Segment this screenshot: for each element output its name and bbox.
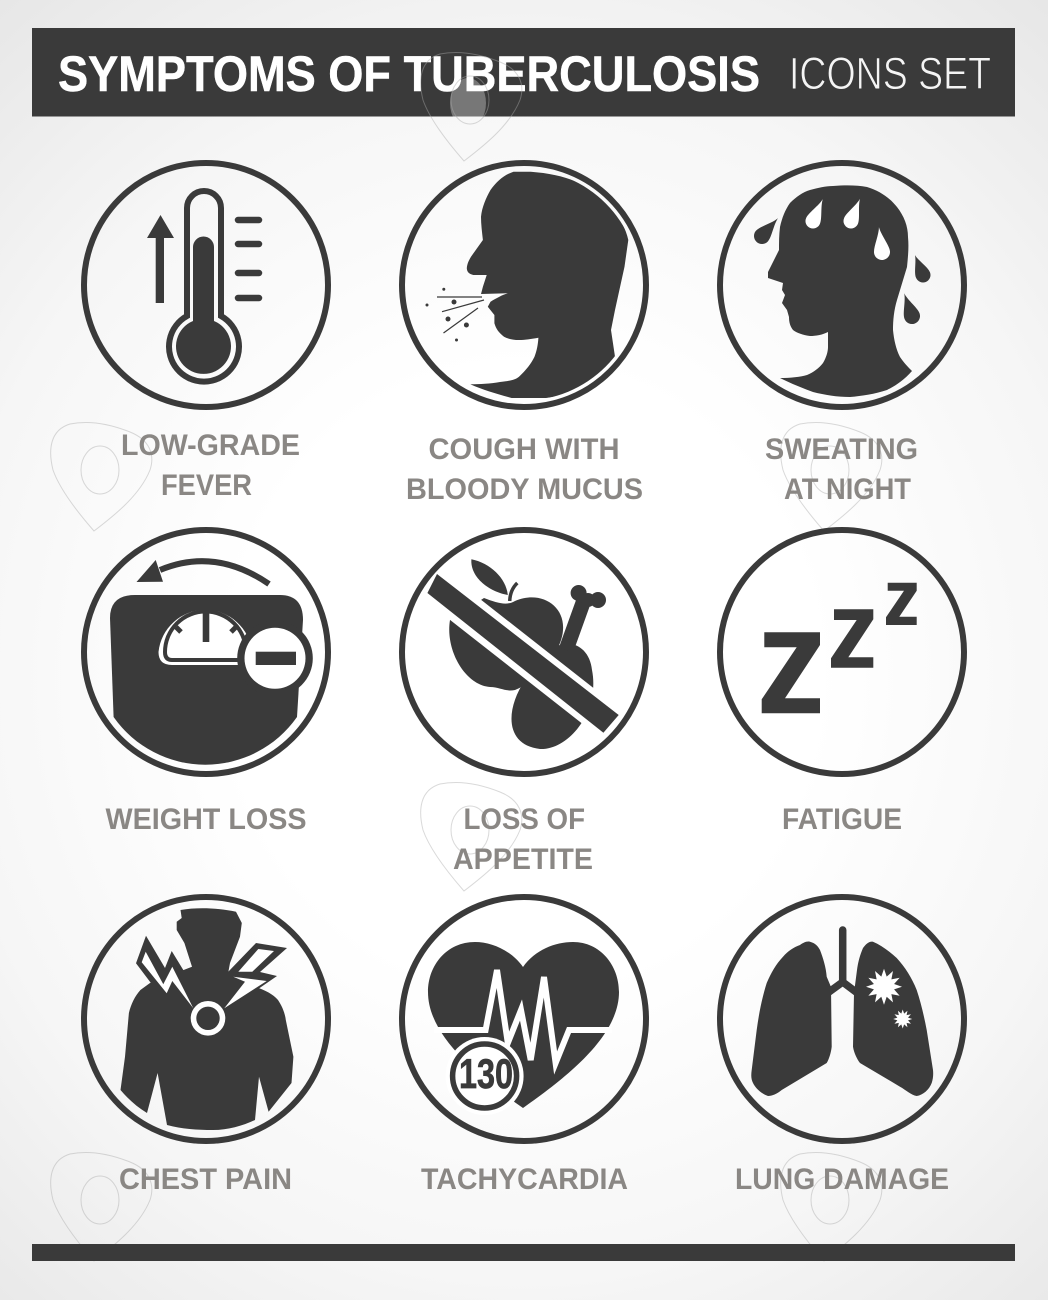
- icon: minus badge: [237, 620, 313, 696]
- panel: tachycardia: [402, 897, 646, 1196]
- icon: heart with pulse: [428, 942, 619, 1115]
- label: chest pain: CHEST PAIN: [119, 1163, 292, 1196]
- label: sweating at night: SWEATING: [765, 433, 918, 466]
- title banner: [32, 28, 1015, 116]
- label: tachycardia: TACHYCARDIA: [421, 1163, 628, 1196]
- label: low-grade fever: LOW-GRADE: [121, 429, 300, 462]
- panel: loss of appetite: [402, 530, 646, 876]
- label: sweating at night: [765, 433, 918, 506]
- panel: fatigue: [720, 530, 964, 836]
- icon: thermometer: [147, 191, 259, 382]
- icon: lung lesions: [866, 969, 912, 1028]
- title: symptoms of tuberculosis: SYMPTOMS OF TUBERCULOSIS: [58, 46, 760, 102]
- label: loss of appetite: APPETITE: [453, 843, 593, 876]
- footer bar: [32, 1244, 1015, 1261]
- panel: weight loss: [84, 530, 328, 836]
- label: loss of appetite: LOSS OF: [464, 803, 585, 836]
- label: sweating at night: AT NIGHT: [784, 473, 911, 506]
- label: loss of appetite: [453, 803, 593, 876]
- icon: crossed out food: [427, 559, 619, 749]
- label: low-grade fever: [121, 429, 300, 502]
- icon: right lightning bolt: [222, 943, 287, 1008]
- icon: heart rate badge: [446, 1037, 524, 1115]
- panel: lung damage: [720, 897, 964, 1196]
- icon: torso with pain: [120, 908, 293, 1130]
- icon: heart rate badge: 130: [459, 1050, 513, 1097]
- icon: lungs: [751, 930, 933, 1096]
- panel: chest pain: [84, 897, 328, 1196]
- subtitle: icons set: ICONS SET: [789, 48, 991, 99]
- label: cough with bloody mucus: [406, 433, 643, 506]
- icon: sweating head: [751, 185, 933, 397]
- icon: left lightning bolt: [136, 936, 200, 1008]
- panel: low-grade fever: [84, 163, 328, 502]
- label: cough with bloody mucus: BLOODY MUCUS: [406, 473, 643, 506]
- icon: pain point ring: [194, 1004, 222, 1033]
- label: cough with bloody mucus: COUGH WITH: [428, 433, 620, 466]
- label: weight loss: WEIGHT LOSS: [106, 803, 306, 836]
- label: low-grade fever: FEVER: [161, 469, 252, 502]
- icon: scale with arrow: [110, 560, 313, 765]
- icon: coughing head: [426, 172, 628, 398]
- label: lung damage: LUNG DAMAGE: [735, 1163, 949, 1196]
- panel: cough with bloody mucus: [402, 163, 646, 506]
- panel: sweating at night: [720, 163, 964, 506]
- label: fatigue: FATIGUE: [782, 803, 902, 836]
- icon: sleep zzz: [762, 583, 917, 713]
